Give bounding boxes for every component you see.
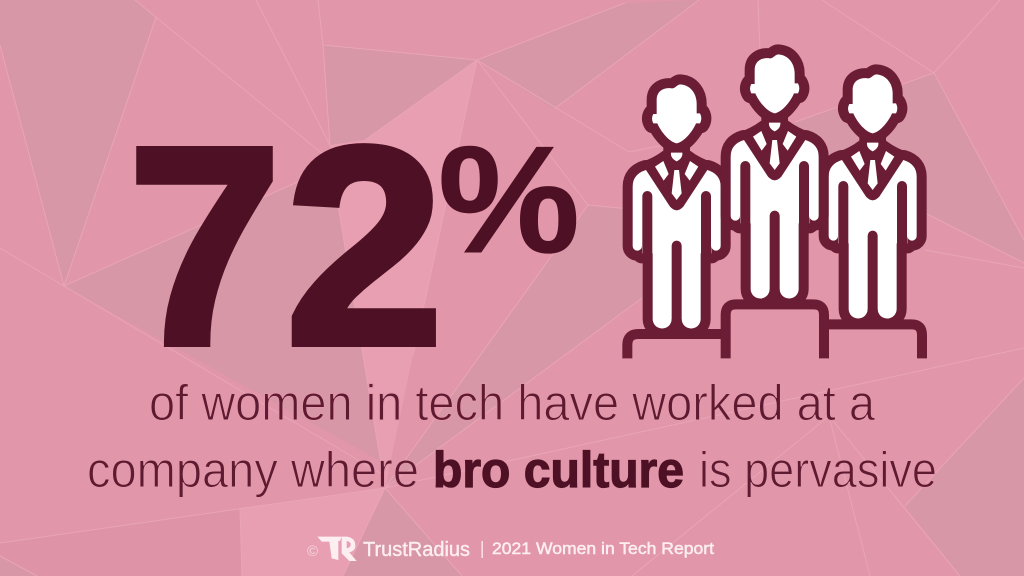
copyright symbol: © xyxy=(307,543,318,560)
person right xyxy=(829,74,917,318)
TrustRadius wordmark: TrustRadius xyxy=(363,539,470,561)
TrustRadius logo mark xyxy=(317,537,357,561)
caption text xyxy=(87,375,937,498)
percent sign: % xyxy=(438,115,580,285)
icon: three businessmen on podium xyxy=(627,54,922,358)
separator xyxy=(482,541,483,558)
big number 72% xyxy=(128,89,580,404)
person center xyxy=(731,54,819,298)
report title: 2021 Women in Tech Report xyxy=(492,539,714,558)
caption line 2 end: is pervasive xyxy=(699,442,937,498)
person left xyxy=(633,84,721,328)
digit 7: 7 xyxy=(128,89,282,404)
podium right step xyxy=(824,324,922,358)
digit 2: 2 xyxy=(285,89,444,404)
caption line 1: of women in tech have worked at a xyxy=(149,375,875,431)
podium center step xyxy=(726,304,824,358)
footer branding xyxy=(307,537,714,561)
podium left step xyxy=(627,334,726,358)
caption emphasis: bro culture xyxy=(433,442,684,498)
caption line 2 start: company where xyxy=(87,442,419,498)
